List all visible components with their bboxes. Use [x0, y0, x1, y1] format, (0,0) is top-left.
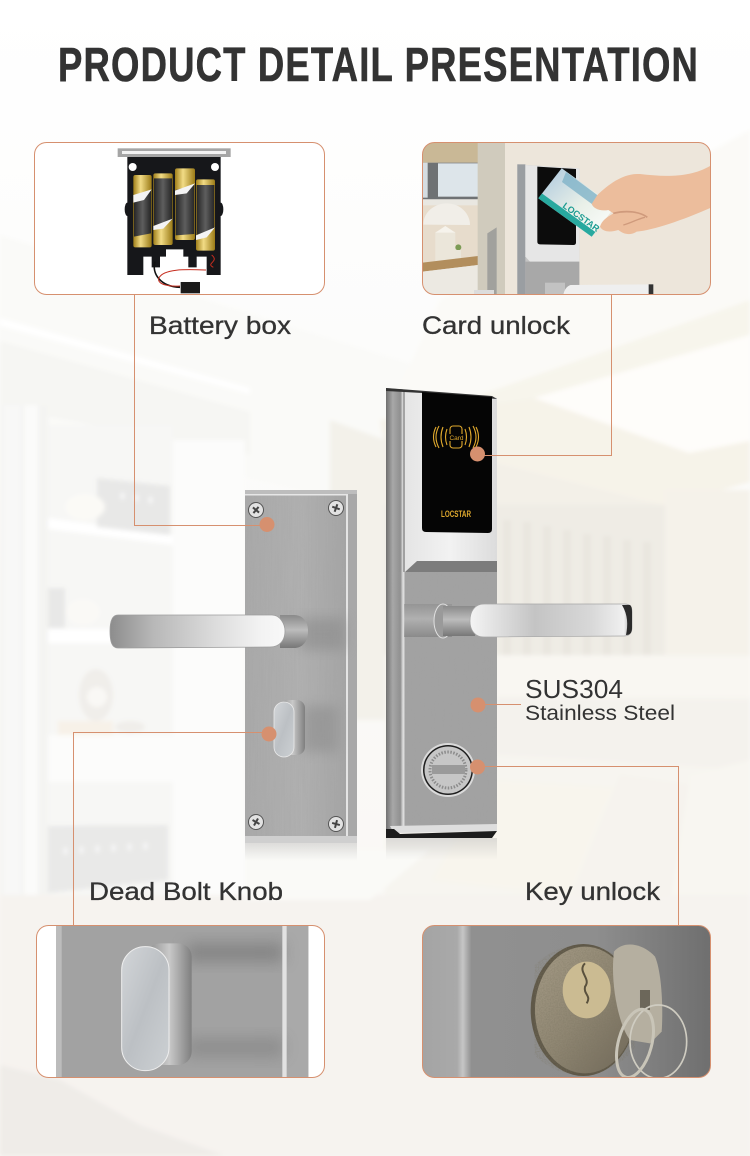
label: card unlock: Card unlock — [422, 312, 571, 340]
card reader panel — [422, 392, 492, 533]
callout line: stainless steel — [478, 704, 521, 706]
callout dot: card — [470, 446, 485, 462]
lever shadow — [300, 618, 345, 650]
dead bolt knob — [274, 700, 338, 757]
callout dot: knob — [262, 726, 276, 742]
hand holding card — [592, 165, 712, 234]
label: key unlock: Key unlock — [525, 878, 661, 906]
label: dead bolt knob: Dead Bolt Knob — [89, 878, 283, 906]
access card: LOCSTAR — [561, 201, 602, 234]
callout line: dead bolt knob — [74, 732, 269, 925]
label: SUS304 stainless steel: SUS304 — [525, 674, 623, 704]
label: battery box: Battery box — [149, 312, 292, 340]
lever handle — [110, 615, 308, 648]
callout dot: battery — [260, 517, 274, 532]
right lock body — [386, 388, 632, 860]
access card — [538, 168, 615, 237]
card reader icon — [434, 426, 478, 448]
panel: key unlock close-up — [422, 926, 710, 1081]
callout dot: key — [470, 760, 485, 774]
brand: LOCSTAR — [441, 509, 471, 519]
miniature lock — [517, 164, 653, 295]
title: PRODUCT DETAIL PRESENTATION — [58, 38, 698, 92]
callout line: card unlock — [478, 294, 612, 456]
label: SUS304 stainless steel: Stainless Steel — [525, 702, 675, 725]
panel: card unlock — [422, 142, 712, 295]
callout line: battery box — [134, 294, 268, 526]
left back plate with lever and knob — [110, 490, 357, 861]
card text: Card — [449, 435, 464, 442]
battery holder illustration — [118, 148, 231, 293]
panel: battery box — [34, 142, 324, 294]
key cover — [421, 743, 475, 797]
screws — [248, 500, 344, 832]
panel: dead bolt knob close-up — [36, 925, 324, 1078]
callout dot: stainless steel — [470, 698, 486, 712]
right lever handle — [404, 604, 632, 638]
callout line: key unlock — [478, 766, 678, 925]
label: SUS304 stainless steel — [525, 674, 675, 725]
room and door scene — [423, 143, 505, 294]
